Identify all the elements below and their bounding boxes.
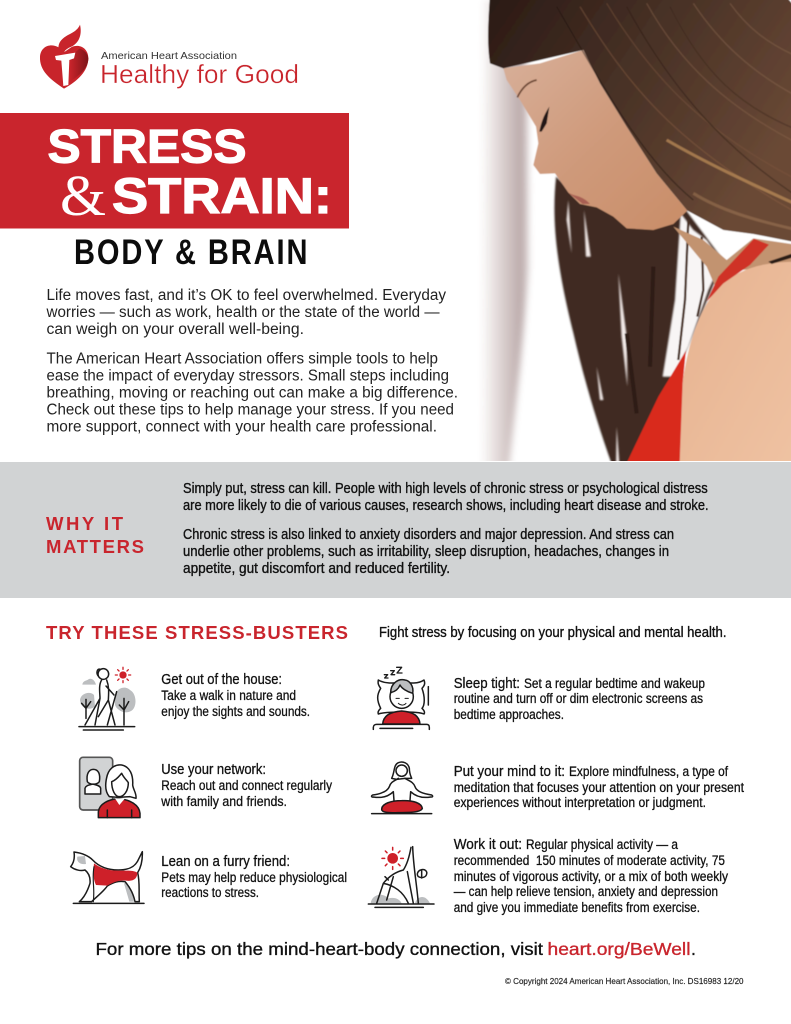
- intro text: Check out these tips to help manage your stress. If you need: [46, 402, 454, 418]
- text: lean on a furry friend: Pets may help reduce physiological: [161, 870, 347, 885]
- text: use your network: Reach out and connect regularly: [161, 778, 332, 793]
- text: work it out: minutes of vigorous activity, or a mix of both weekly: [454, 869, 728, 884]
- title: Stress: STRESS: [48, 120, 246, 173]
- title: ampersand: &: [60, 163, 106, 228]
- text: why it matters body: are more likely to die of various causes, research shows, including heart disease and stroke.: [183, 498, 709, 514]
- text: fight stress: Fight stress by focusing on your physical and mental health.: [379, 625, 726, 641]
- heading: why it matters: WHY IT: [46, 513, 124, 534]
- text: Healthy for Good: Healthy for Good: [100, 59, 299, 89]
- call to action: For more tips on the mind-heart-body connection, visit: [96, 939, 543, 959]
- subtitle: Body and Brain: BODY & BRAIN: [74, 232, 309, 272]
- intro text: more support, connect with your health care professional.: [46, 418, 437, 436]
- text: sleep tight: routine and turn off or dim electronic screens as: [454, 691, 703, 706]
- panel: why it matters: [0, 462, 791, 598]
- call to action: [96, 939, 696, 959]
- text: put your mind to it: Explore mindfulness, a type of: [569, 764, 728, 779]
- text: get out of the house: Take a walk in nature and: [161, 688, 296, 703]
- heading: why it matters: MATTERS: [46, 536, 144, 557]
- call to action: heart.org/BeWell: [548, 939, 690, 959]
- text: why it matters body: [183, 481, 709, 577]
- text: American Heart Association: American Heart Association: [101, 50, 237, 62]
- text: lean on a furry friend: reactions to stress.: [161, 885, 259, 900]
- title: Strain: STRAIN:: [112, 168, 332, 224]
- text: put your mind to it: meditation that focuses your attention on your present: [454, 780, 744, 795]
- intro text: [46, 287, 458, 436]
- intro text: ease the impact of everyday stressors. Small steps including: [46, 368, 449, 384]
- text: lean on a furry friend: Lean on a furry friend:: [161, 853, 290, 870]
- icon: heart and torch: [40, 25, 88, 89]
- text: work it out: and give you immediate benefits from exercise.: [454, 900, 700, 915]
- text: put your mind to it: [454, 763, 744, 810]
- text: sleep tight: Set a regular bedtime and wakeup: [524, 676, 705, 691]
- copyright: © Copyright 2024 American Heart Association, Inc. DS16983 12/20: [505, 976, 744, 986]
- intro text: can weigh on your overall well-being.: [46, 321, 304, 338]
- text: put your mind to it: Put your mind to it:: [454, 763, 565, 780]
- intro text: Life moves fast, and it’s OK to feel overwhelmed. Everyday: [46, 287, 446, 304]
- text: use your network: Use your network:: [161, 761, 266, 778]
- main hair: [488, 0, 791, 243]
- neck and shoulder: [673, 227, 791, 290]
- text: get out of the house: [161, 671, 310, 719]
- text: use your network: with family and friends.: [160, 794, 287, 809]
- face: [503, 50, 687, 230]
- text: work it out: Work it out:: [454, 836, 522, 853]
- icon: dog: [71, 852, 144, 903]
- icon: yoga triangle pose with sun: [368, 847, 434, 907]
- logo: American Heart Association Healthy for Good: [40, 25, 299, 89]
- text: get out of the house: enjoy the sights and sounds.: [161, 704, 310, 719]
- heading: why it matters: [46, 513, 144, 557]
- text: sleep tight: bedtime approaches.: [454, 707, 564, 722]
- text: get out of the house: Get out of the house:: [161, 671, 282, 688]
- text: why it matters body: Simply put, stress can kill. People with high levels of chronic stress or psychological distress: [183, 481, 708, 497]
- icon: woman walking: [79, 667, 135, 730]
- photo: woman leaning head on wall: [484, 0, 791, 461]
- intro text: breathing, moving or reaching out can make a big difference.: [46, 384, 458, 402]
- icon: woman meditating: [372, 762, 433, 814]
- intro text: The American Heart Association offers simple tools to help: [46, 350, 438, 368]
- icon: video call with friend: [80, 757, 140, 818]
- text: sleep tight: Sleep tight:: [454, 675, 520, 692]
- text: work it out: Regular physical activity — a: [526, 837, 678, 852]
- call to action: .: [691, 939, 696, 959]
- title banner: [0, 113, 349, 228]
- text: put your mind to it: experiences without interpretation or judgment.: [454, 795, 706, 810]
- dress: [626, 350, 686, 461]
- text: work it out: recommended 150 minutes of moderate activity, 75: [454, 853, 725, 868]
- intro text: worries — such as work, health or the state of the world —: [46, 304, 440, 321]
- text: why it matters body: Chronic stress is also linked to anxiety disorders and major depression. And stress can: [183, 527, 674, 543]
- text: why it matters body: appetite, gut discomfort and reduced fertility.: [183, 561, 450, 577]
- heading: try these stress-busters: TRY THESE STRESS-BUSTERS: [46, 622, 348, 643]
- text: why it matters body: underlie other problems, such as irritability, sleep disruption, headaches, changes in: [183, 544, 669, 560]
- text: use your network: [160, 761, 332, 809]
- text: work it out: [454, 836, 728, 915]
- text: work it out: — can help relieve tension, anxiety and depression: [454, 884, 718, 899]
- hanging hair: [554, 177, 723, 473]
- icon: boy sleeping: [373, 667, 429, 729]
- text: sleep tight: [454, 675, 705, 722]
- text: lean on a furry friend: [161, 853, 347, 900]
